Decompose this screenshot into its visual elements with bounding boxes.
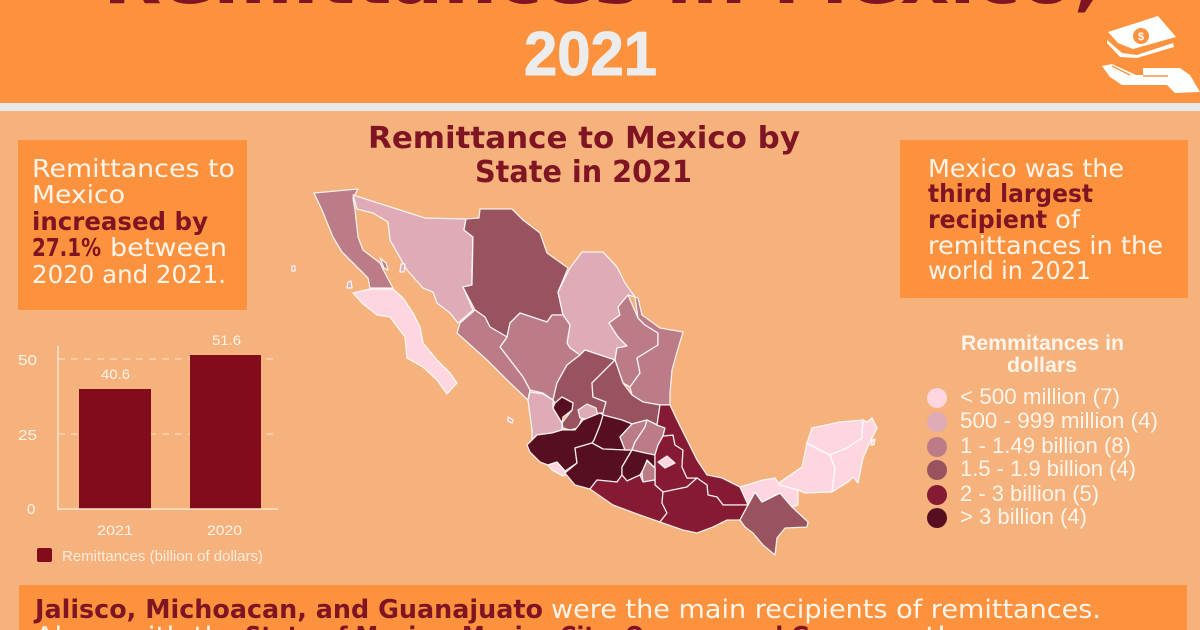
map heading: State in 2021 — [475, 155, 692, 190]
legend labels: 1 - 1.49 billion (8) — [960, 433, 1131, 458]
icon: money over hand: $ — [1138, 31, 1144, 43]
legend labels: 2 - 3 billion (5) — [960, 481, 1099, 506]
chart legend: Remittances (billion of dollars) — [62, 548, 263, 565]
panel: remittances increase callout — [18, 140, 247, 310]
legend labels: < 500 million (7) — [960, 384, 1120, 409]
legend title: Remmitances in — [961, 332, 1124, 355]
panel: third largest recipient callout: recipient — [928, 205, 1047, 234]
legend swatches — [927, 388, 947, 528]
choropleth map of Mexico — [292, 189, 877, 555]
panel: third largest recipient callout: world in 2021 — [928, 256, 1091, 285]
chart axis and value labels: 25 — [18, 427, 37, 444]
header band — [0, 0, 1200, 111]
title: 2021 — [524, 20, 657, 89]
chart axis and value labels: 40.6 — [101, 366, 130, 382]
icon: money over hand — [1102, 16, 1200, 93]
map legend — [927, 332, 1158, 529]
chart axis and value labels — [18, 332, 242, 538]
panel: remittances increase callout: Mexico — [32, 180, 125, 209]
chart axis and value labels: 0 — [27, 501, 35, 518]
panel: third largest recipient callout: third largest — [928, 179, 1093, 208]
legend title: dollars — [1007, 354, 1077, 377]
panel: remittances increase callout: 2020 and 2021. — [32, 260, 226, 289]
panel: main recipients summary — [19, 585, 1187, 630]
panel: main recipients summary: were the main recipients of remittances. — [551, 595, 1101, 625]
chart axis and value labels: 50 — [18, 352, 37, 369]
panel: third largest recipient callout — [900, 140, 1188, 298]
panel: remittances increase callout: 27.1% — [32, 233, 101, 262]
chart axis and value labels: 51.6 — [212, 332, 241, 348]
panel: third largest recipient callout: remittances in the — [928, 231, 1163, 260]
legend labels: 500 - 999 million (4) — [960, 408, 1158, 433]
bar: 2020 value 51.6 — [190, 355, 261, 509]
panel: remittances increase callout: increased by — [32, 207, 208, 236]
legend labels: 1.5 - 1.9 billion (4) — [960, 456, 1136, 481]
panel: third largest recipient callout: Mexico was the — [928, 154, 1124, 183]
map heading: Remittance to Mexico by — [368, 121, 800, 156]
bar: 2021 value 40.6 — [79, 389, 151, 509]
title — [103, 0, 1100, 89]
chart axis and value labels: 2020 — [207, 522, 242, 538]
map heading — [368, 121, 800, 190]
bar chart: remittances by year — [18, 332, 278, 565]
legend labels: > 3 billion (4) — [960, 504, 1087, 529]
legend labels — [960, 384, 1158, 529]
legend title — [961, 332, 1124, 377]
panel: third largest recipient callout: of — [1055, 205, 1081, 234]
panel: main recipients summary: Jalisco, Michoacan, and Guanajuato — [33, 595, 543, 625]
panel: remittances increase callout: between — [110, 233, 227, 262]
panel: remittances increase callout: Remittances to — [32, 154, 235, 183]
chart axis and value labels: 2021 — [97, 522, 133, 538]
